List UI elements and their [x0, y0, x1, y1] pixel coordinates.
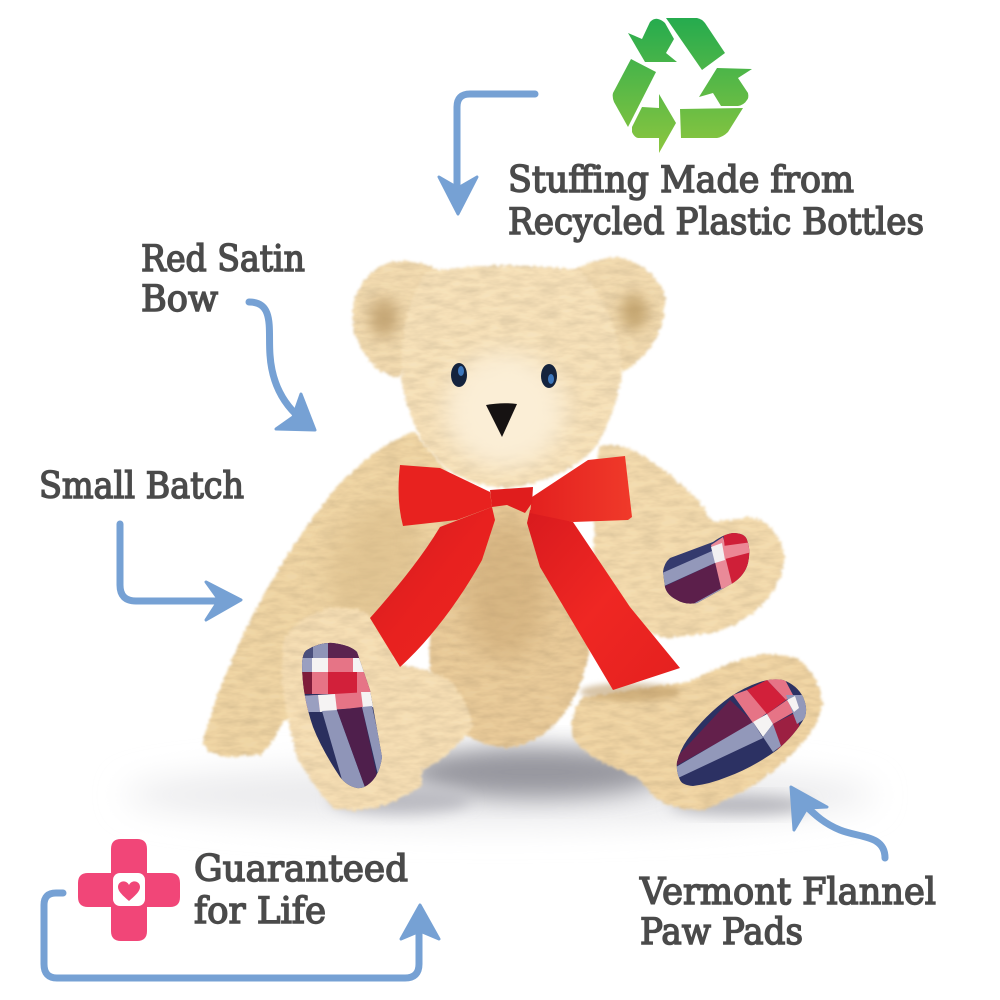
arrow: red satin bow — [249, 302, 315, 430]
arrow: stuffing — [439, 94, 535, 214]
red satin bow — [370, 456, 680, 690]
plaid hand pad — [663, 533, 750, 604]
arrow: guaranteed for life — [44, 893, 439, 978]
right loop — [530, 456, 632, 522]
bear muzzle — [445, 352, 565, 468]
label: red satin bow — [141, 239, 305, 320]
bear left arm — [203, 432, 470, 757]
left arm shading — [309, 483, 441, 637]
bear left eye — [451, 363, 467, 387]
ground shadow — [125, 746, 875, 825]
arrow: small batch — [120, 524, 241, 620]
label: stuffing — [508, 160, 924, 243]
right ribbon tail — [527, 510, 680, 690]
bear right eye — [541, 364, 557, 388]
label: stuffing: Recycled Plastic Bottles — [508, 202, 924, 243]
belly shading — [463, 520, 547, 660]
label: vermont flannel: Paw Pads — [640, 912, 803, 953]
recycling icon — [613, 18, 752, 153]
bear head — [401, 265, 622, 488]
label: red satin bow: Red Satin — [141, 239, 305, 280]
label: red satin bow: Bow — [141, 279, 218, 320]
icon: medical cross with heart — [78, 839, 180, 941]
bear right leg — [572, 654, 823, 810]
left ribbon tail — [370, 507, 495, 667]
bow knot — [490, 487, 533, 513]
bear body — [429, 493, 592, 748]
label: small batch: Small Batch — [39, 466, 244, 507]
bear nose — [486, 403, 517, 437]
label: vermont flannel — [639, 872, 936, 953]
plaid right foot pad — [676, 679, 806, 786]
label: vermont flannel: Vermont Flannel — [639, 872, 936, 913]
plaid left foot pad — [302, 642, 382, 788]
label: stuffing: Stuffing Made from — [508, 160, 854, 201]
bear left leg — [282, 608, 473, 810]
right leg crease shading — [580, 683, 680, 701]
bear right arm — [593, 444, 784, 638]
label: guaranteed for life — [194, 849, 408, 932]
left loop — [399, 465, 492, 526]
label: guaranteed for life: for Life — [194, 891, 326, 932]
bear right ear — [570, 257, 665, 373]
bear left ear — [353, 261, 445, 378]
teddy bear — [203, 257, 823, 810]
arrow: vermont flannel — [791, 787, 885, 858]
label: guaranteed for life: Guaranteed — [194, 849, 408, 890]
